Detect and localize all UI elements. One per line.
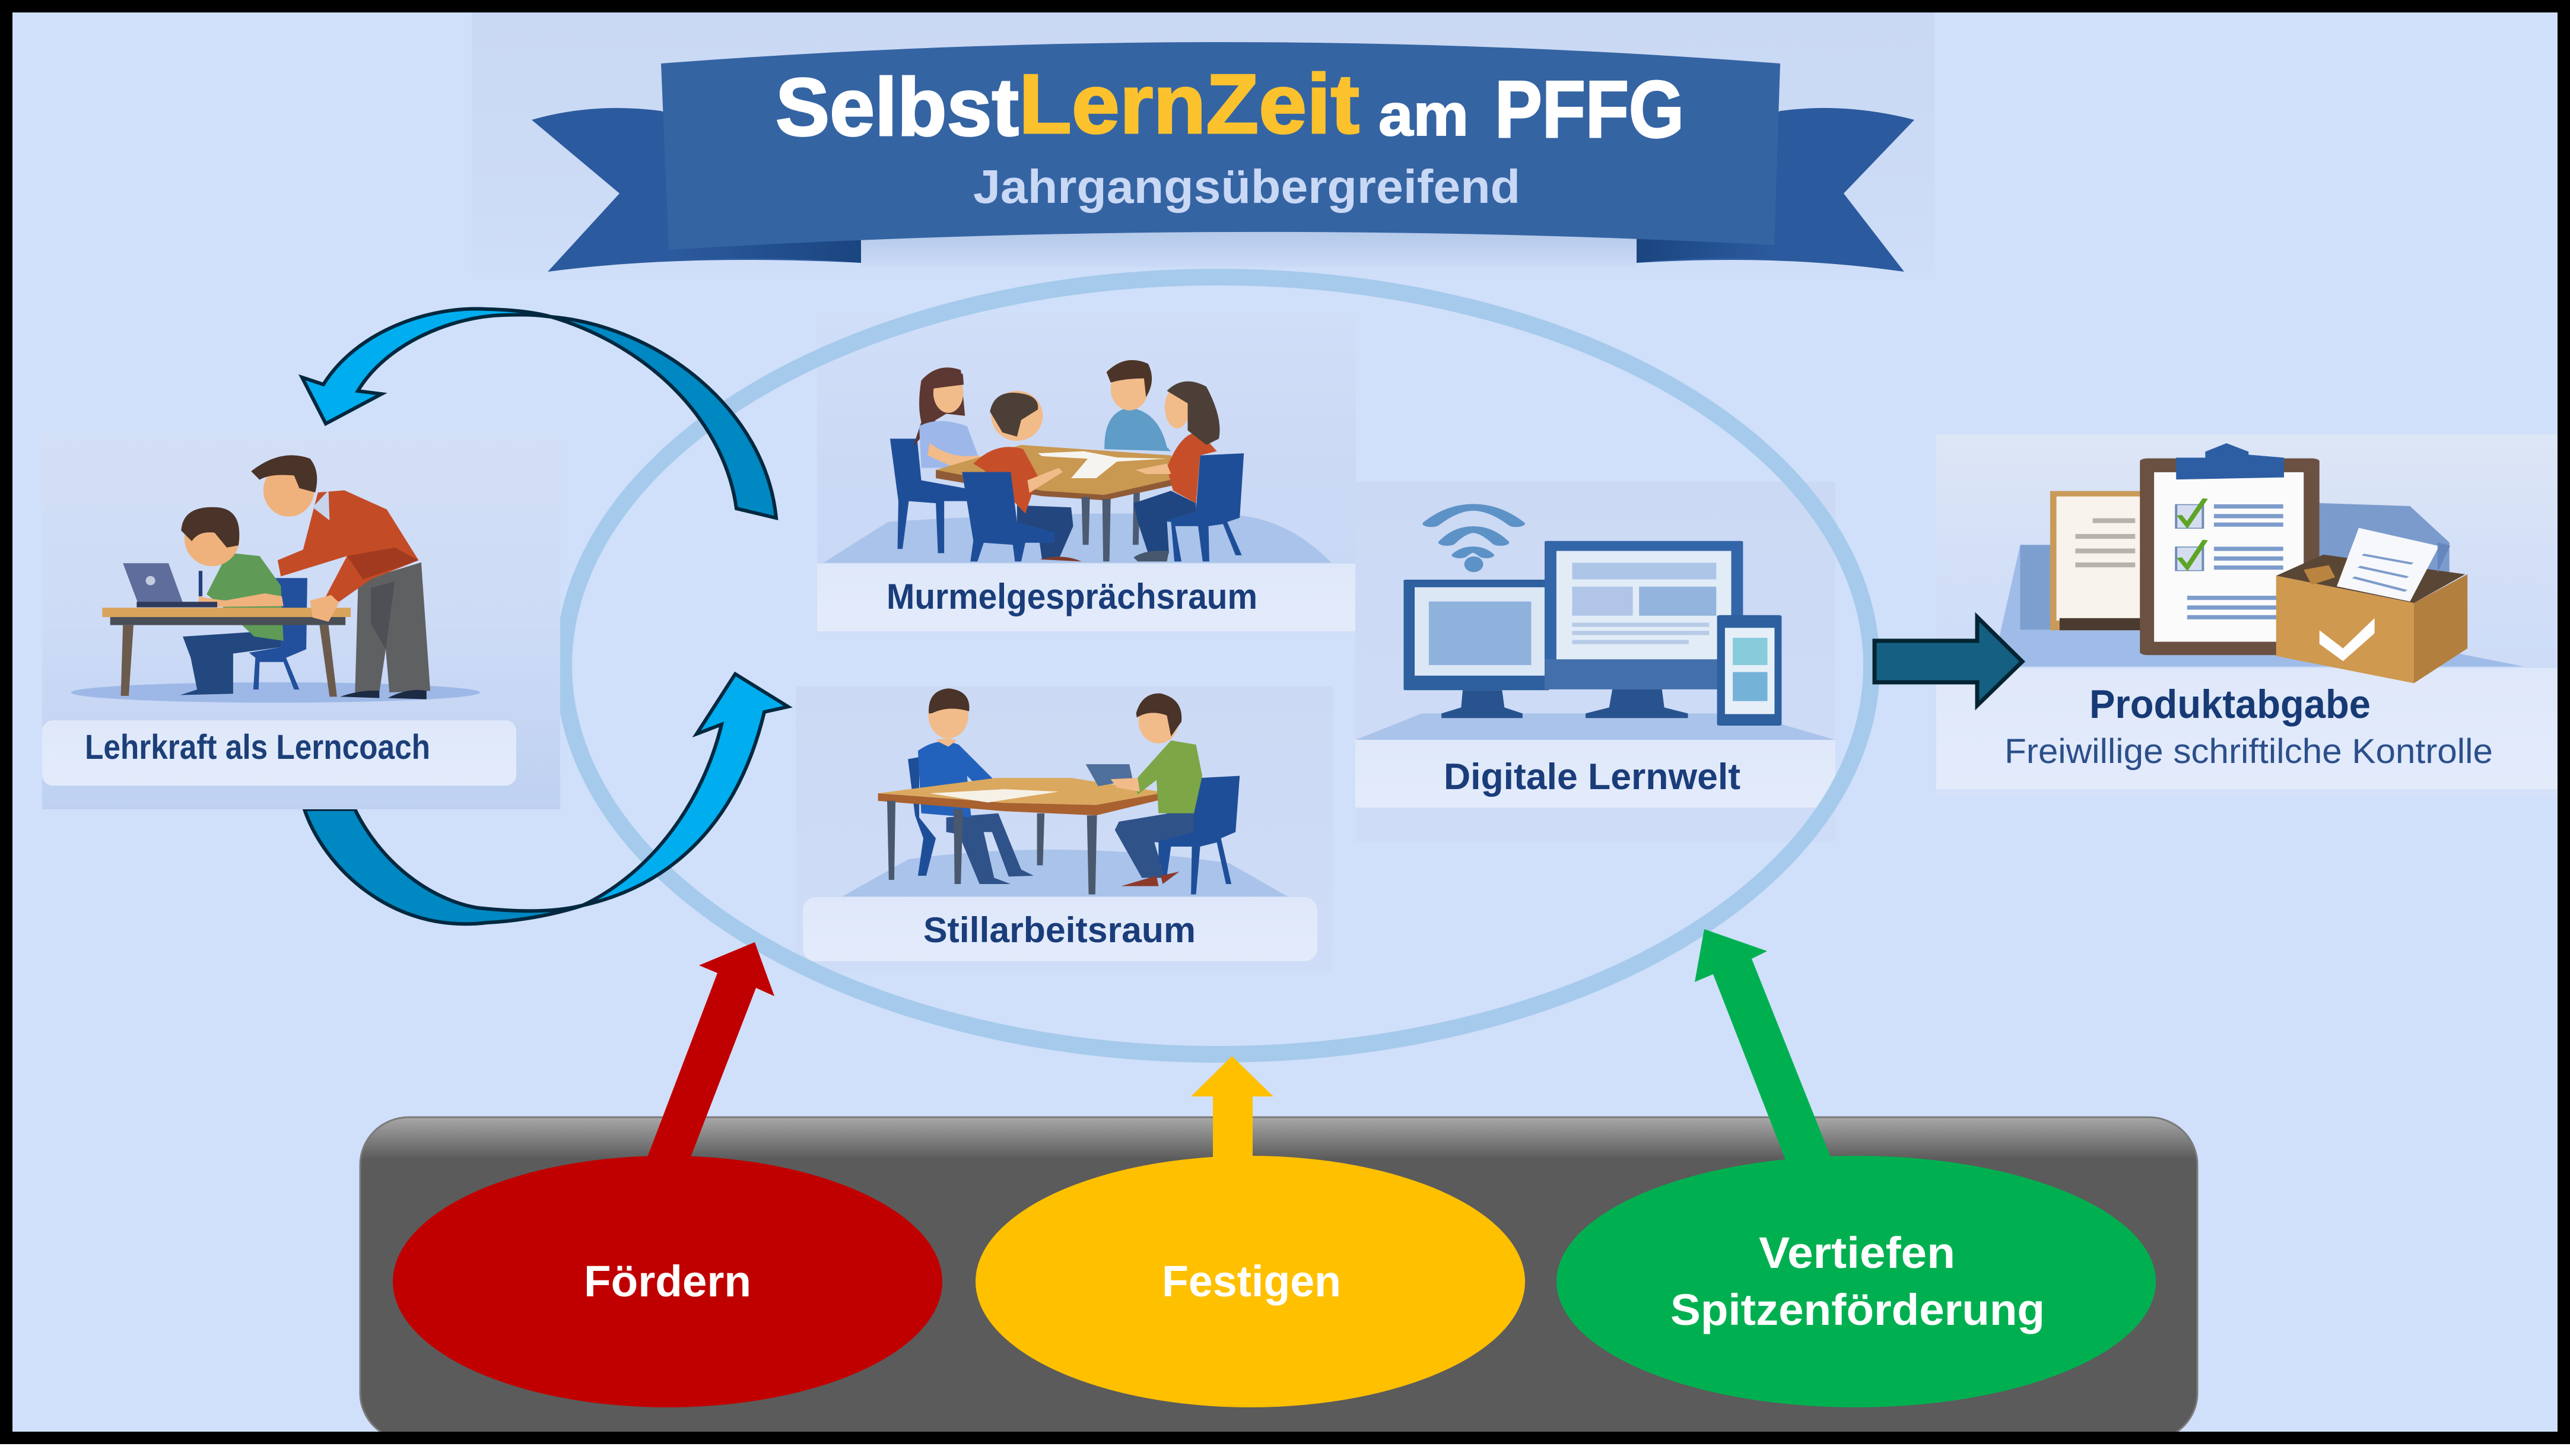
panel: Produktabgabe — [1936, 434, 2557, 797]
panel: Murmelgesprächsraum — [817, 314, 1356, 631]
pill: Vertiefen Spitzenförderung: Vertiefen — [1759, 1228, 1955, 1277]
panel: Digitale Lernwelt — [1355, 482, 1835, 842]
label: Digitale Lernwelt: Digitale Lernwelt — [1444, 756, 1740, 797]
subtitle: Jahrgangsübergreifend — [973, 160, 1520, 213]
loop arrow: lower tail — [304, 809, 584, 924]
differentiation bar — [360, 1117, 2197, 1441]
panel: Stillarbeitsraum — [796, 686, 1333, 973]
illustration: group discussion — [824, 360, 1332, 562]
label bar: Stillarbeitsraum — [803, 897, 1317, 961]
illustration: clipboard and submission box — [1993, 443, 2524, 684]
label bar: Murmelgesprächsraum — [817, 564, 1356, 631]
loop arrow: lower head — [583, 674, 788, 905]
arrow: yellow — [1191, 1056, 1273, 1157]
label: Stillarbeitsraum: Stillarbeitsraum — [923, 910, 1196, 950]
arrow: red — [647, 942, 774, 1157]
text: Freiwillige schriftilche Kontrolle: Freiwillige schriftilche Kontrolle — [2004, 732, 2493, 771]
pill: Vertiefen Spitzenförderung: Spitzenförderung — [1670, 1285, 2045, 1334]
title: PFFG — [1495, 64, 1684, 154]
illustration: teacher and student — [71, 455, 480, 702]
loop arrow: upper — [302, 309, 776, 518]
icon: wifi dot — [1465, 557, 1483, 572]
label bar: Digitale Lernwelt — [1355, 740, 1835, 808]
pill: Vertiefen Spitzenförderung — [1556, 1156, 2156, 1407]
label: Murmelgesprächsraum: Murmelgesprächsraum — [887, 577, 1257, 616]
banner ribbon — [532, 42, 1914, 272]
panel: Lehrkraft als Lerncoach — [42, 433, 560, 809]
learning space ellipse — [564, 277, 1872, 1054]
icon: wifi — [1431, 507, 1516, 555]
arrow: to Produktabgabe — [1875, 617, 2022, 705]
pill: Fördern — [393, 1156, 942, 1407]
title — [776, 57, 1684, 154]
heading: Produktabgabe: Produktabgabe — [2089, 682, 2371, 727]
label: Lehrkraft als Lerncoach: Lehrkraft als Lerncoach — [85, 728, 430, 767]
illustration: quiet work — [842, 688, 1288, 897]
panel: title background — [472, 12, 1934, 279]
pill: Festigen — [976, 1156, 1525, 1407]
pill: Festigen: Festigen — [1162, 1257, 1341, 1306]
title: Selbst — [776, 62, 1019, 153]
illustration: devices with wifi — [1356, 507, 1835, 740]
title: am — [1378, 82, 1469, 148]
arrow: green — [1695, 929, 1831, 1160]
pill: Fördern: Fördern — [584, 1257, 751, 1306]
title: LernZeit — [1019, 57, 1359, 151]
